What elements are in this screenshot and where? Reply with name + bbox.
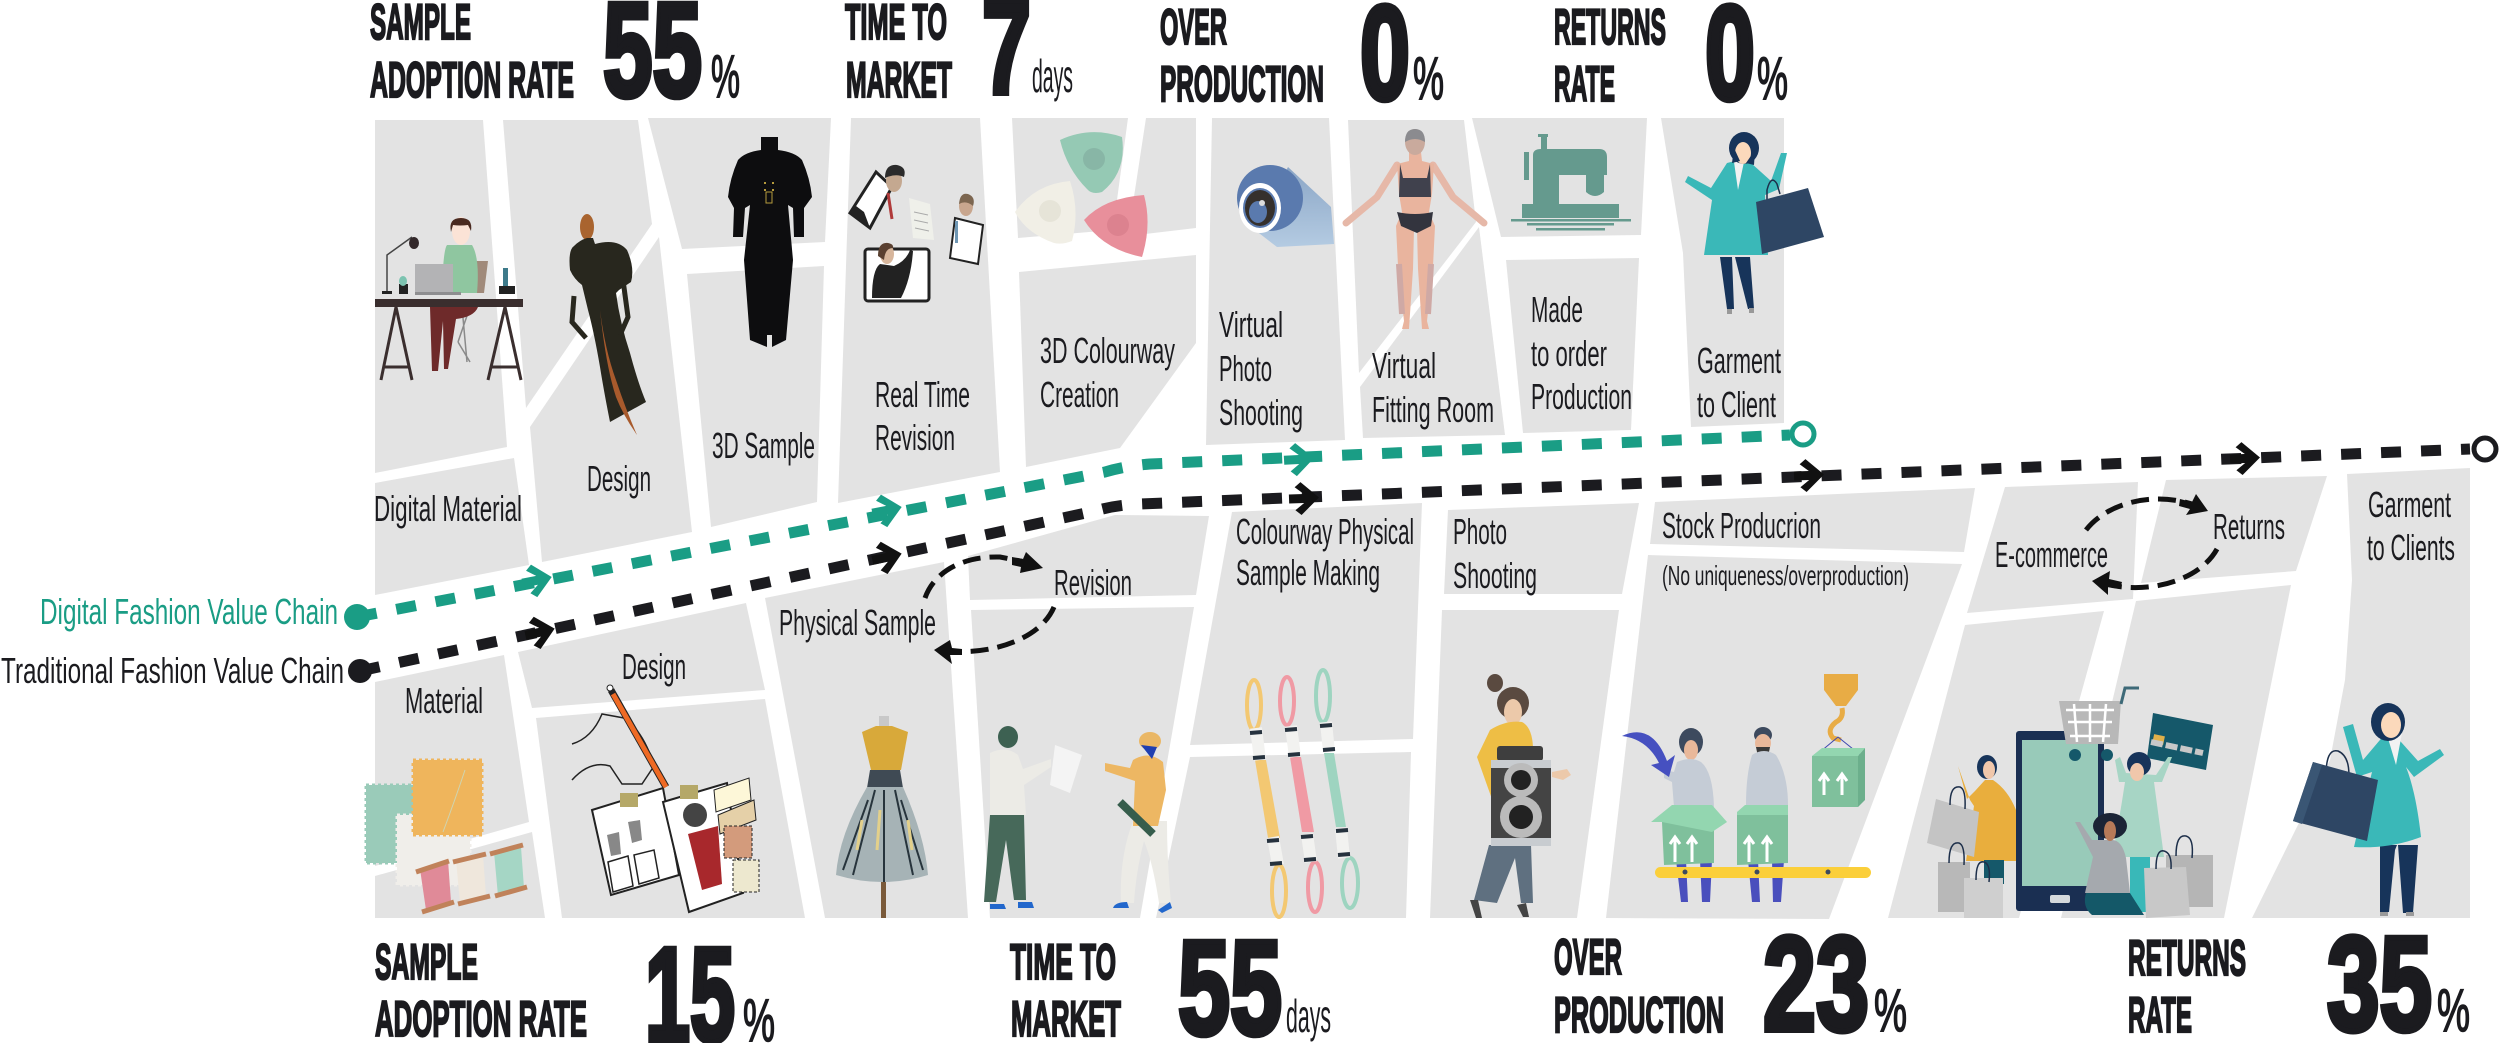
text block: traditional chain step labels: Stock Producrion [1662,505,1821,546]
heading: traditional over production stat [1554,910,1907,1043]
text block: digital chain step labels: to Client [1697,384,1776,425]
text block: traditional chain step labels: Photo [1453,511,1507,552]
text block: traditional chain step labels: Revision [1054,562,1132,603]
icon: physical sample dress on mannequin [836,716,928,918]
text block: traditional chain step labels: Design [622,646,686,687]
icon: hand sketching garment [572,685,759,912]
heading: traditional time to market stat: TIME TO [1010,934,1116,990]
icon: virtual fitting room avatar [1346,129,1484,329]
heading: traditional returns rate stat: RETURNS [2128,930,2246,986]
heading: traditional over production stat: PRODUCTION [1554,987,1724,1043]
text block: digital chain step labels: 3D Colourway [1040,330,1175,371]
heading: digital over production stat [1160,0,1444,128]
heading: traditional over production stat: OVER [1554,929,1622,985]
text block: digital chain step labels: to order [1531,333,1607,374]
icon: embroidery thread skeins [1247,670,1358,917]
heading: digital sample adoption rate stat: ADOPTION RATE [370,52,574,108]
text block: digital chain step labels: Real Time [875,374,970,415]
icon: e-commerce phone with shoppers [1927,688,2213,918]
text: days [1032,50,1073,102]
text block: digital chain step labels: 3D Sample [712,425,815,466]
text block: digital chain step labels: Virtual [1219,304,1283,345]
arrow: e-commerce and returns loop [2086,494,2217,595]
text block: digital chain step labels: Virtual [1372,345,1436,386]
arrow: digital value chain dashed line [344,423,1814,630]
text block: digital chain step labels: Shooting [1219,392,1303,433]
text block: digital chain step labels: Revision [875,417,955,458]
heading: digital returns rate stat: RETURNS [1554,0,1666,55]
text block: digital chain step labels: Creation [1040,374,1119,415]
heading: digital over production stat: OVER [1160,0,1227,55]
heading: digital over production stat: % [1413,45,1444,112]
icon: virtual camera lens [1237,165,1334,247]
icon: black 3D sample dress [728,137,812,347]
text block: digital chain step labels: Fitting Room [1372,389,1494,430]
heading: digital sample adoption rate stat [370,0,740,125]
heading: digital over production stat: PRODUCTION [1160,56,1324,112]
heading: digital time to market stat [845,0,1073,122]
text block: digital chain step labels [374,289,1781,529]
icon: designer at desk [375,217,523,380]
heading: traditional returns rate stat [2128,910,2470,1043]
icon: photographer with twin-lens camera [1470,674,1571,918]
icon: real time revision video call [850,165,983,301]
heading: traditional sample adoption rate stat: SAMPLE [375,934,478,990]
icon: warehouse workers on conveyor [1622,674,1871,902]
text block: traditional chain step labels: Returns [2213,506,2285,547]
text: days [1286,990,1331,1042]
text: traditional fashion value chain legend: Traditional Fashion Value Chain [1,650,344,691]
text block: traditional chain step labels: (No uniqueness/overproduction) [1662,560,1909,591]
text block: digital chain step labels: Made [1531,289,1583,330]
text block: digital chain step labels: Production [1531,376,1632,417]
text block: digital chain step labels: Digital Material [374,488,522,529]
text block: traditional chain step labels: Sample Making [1236,552,1380,593]
text block: traditional chain step labels: Colourway Physical [1236,511,1414,552]
text block: traditional chain step labels: Physical Sample [779,602,936,643]
heading: digital time to market stat: MARKET [846,52,952,108]
panel: traditional chain street map blocks [375,468,2470,919]
icon: colour chalk triangles [1015,132,1148,257]
icon: dress design figure [570,214,646,435]
heading: traditional returns rate stat: RATE [2128,987,2192,1043]
icon: fabric swatches and thread spools [366,760,527,912]
icon: sewing machine [1511,134,1631,230]
text block: digital chain step labels: Garment [1697,340,1781,381]
panel: digital chain street map blocks [375,118,1784,595]
heading: traditional sample adoption rate stat [375,921,775,1043]
text block: digital chain step labels: Photo [1219,348,1272,389]
text block: traditional chain step labels: Material [405,680,483,721]
heading: digital returns rate stat [1554,0,1788,128]
heading: traditional over production stat: % [1874,977,1907,1043]
text block: digital chain step labels: Design [587,458,651,499]
heading: digital returns rate stat: RATE [1554,56,1615,112]
text block: traditional chain step labels: E-commerce [1995,534,2108,575]
heading: traditional time to market stat [1010,914,1331,1043]
icon: client woman with shopping bag [1685,132,1824,314]
heading: digital sample adoption rate stat: % [711,43,740,110]
heading: traditional returns rate stat: % [2437,977,2470,1043]
text: digital fashion value chain legend: Digital Fashion Value Chain [40,591,338,632]
arrow: traditional value chain dashed line [348,438,2496,683]
text block: traditional chain step labels: Shooting [1453,555,1537,596]
icon: client woman with shopping bag (traditional) [2293,703,2444,916]
text block: traditional chain step labels [405,484,2455,721]
icon: two people reviewing a revision [984,726,1172,913]
heading: digital returns rate stat: % [1757,45,1788,112]
arrow: physical sample and revision loop [925,552,1054,664]
